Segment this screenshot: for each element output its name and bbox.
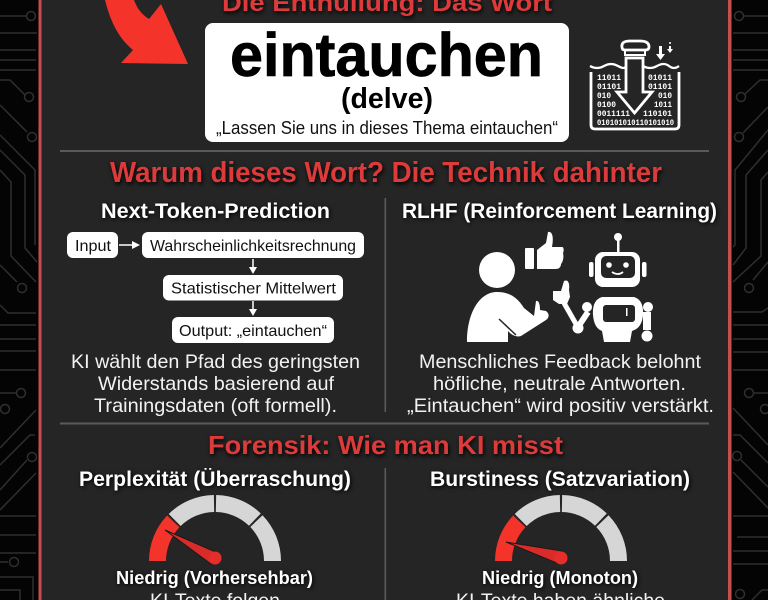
- icon: diving into binary data: 1011: [654, 101, 672, 110]
- description: next-token: Widerstands basierend auf: [98, 373, 335, 395]
- gauge label: low predictable: Niedrig (Vorhersehbar): [116, 567, 313, 588]
- icon: diving into binary data: 11011: [597, 74, 621, 83]
- flow diagram: Wahrscheinlichkeitsrechnung: [150, 238, 356, 255]
- description: RLHF: Menschliches Feedback belohnt: [419, 351, 702, 373]
- panel: next-token prediction: [67, 200, 364, 417]
- subheading: perplexity: Perplexität (Überraschung): [79, 468, 351, 491]
- gauge: burstiness low: [504, 504, 618, 564]
- subheading: next-token prediction: Next-Token-Prediction: [101, 200, 330, 223]
- heading: why this word: Warum dieses Wort? Die Technik dahinter: [110, 157, 662, 189]
- subheading: burstiness: Burstiness (Satzvariation): [430, 468, 690, 491]
- panel: burstiness: [430, 468, 690, 600]
- icon: human with thumbs up: [467, 232, 564, 342]
- icon: diving into binary data: 110101: [643, 110, 672, 119]
- icon: diving into binary data: [590, 41, 679, 129]
- description: next-token: [71, 351, 360, 417]
- circuit pattern: right side: [732, 12, 768, 600]
- icon: diving into binary data: 01101: [648, 83, 672, 92]
- gauge: perplexity low: [158, 504, 272, 564]
- gauge label: low monotone: Niedrig (Monoton): [482, 567, 638, 588]
- dividers: [60, 150, 709, 600]
- description: next-token: KI wählt den Pfad des geringsten: [71, 351, 360, 373]
- word card: [205, 21, 569, 142]
- icon: diving into binary data: 010: [658, 92, 672, 101]
- flow diagram: Statistischer Mittelwert: [171, 280, 337, 298]
- description: RLHF: „Eintauchen“ wird positiv verstärkt.: [407, 395, 714, 417]
- description: RLHF: [407, 351, 714, 417]
- flow diagram: Output: „eintauchen“: [179, 323, 327, 340]
- panel: RLHF: [402, 200, 717, 417]
- description: next-token: Trainingsdaten (oft formell).: [94, 395, 337, 417]
- panel: perplexity: [79, 468, 351, 600]
- arrow: large red pointing to the word: [105, 0, 188, 64]
- example sentence: „Lassen Sie uns in dieses Thema eintauchen“: [216, 118, 558, 138]
- heading: forensics: Forensik: Wie man KI misst: [208, 430, 563, 460]
- subheading: RLHF: RLHF (Reinforcement Learning): [402, 200, 717, 223]
- circuit pattern: left side: [0, 12, 37, 600]
- icon: robot with thumbs up: [553, 233, 653, 342]
- word: eintauchen: eintauchen: [230, 21, 543, 89]
- icon: diving into binary data: 010: [597, 92, 611, 101]
- icon: diving into binary data: 0011111: [597, 110, 630, 119]
- icon: diving into binary data: 01011: [648, 74, 672, 83]
- word: delve: (delve): [341, 83, 433, 115]
- flow diagram: [67, 232, 364, 343]
- description: RLHF: höfliche, neutrale Antworten.: [433, 373, 686, 395]
- icon: diving into binary data: 0100: [597, 101, 616, 110]
- icon: diving into binary data: 01101: [597, 83, 621, 92]
- icon: diving into binary data: 010101010110101010: [597, 119, 674, 128]
- flow diagram: Input: [75, 238, 112, 255]
